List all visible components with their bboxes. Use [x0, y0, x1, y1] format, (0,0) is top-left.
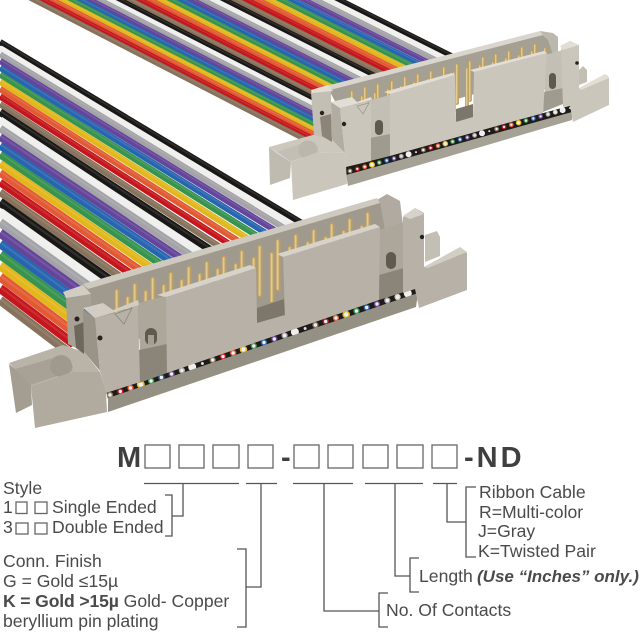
length legend: (Use “Inches” only.) — [477, 567, 639, 586]
length legend: Length — [419, 566, 473, 586]
dash: - — [281, 442, 291, 474]
ribbon cable legend — [478, 482, 596, 561]
part number prefix: M — [117, 442, 141, 474]
left front tine — [31, 372, 107, 428]
upper wire end strip — [345, 105, 573, 176]
underlines and leader lines — [144, 484, 476, 627]
upper lower lip — [346, 112, 572, 186]
lower ribbon cable — [0, 39, 302, 348]
upper left front tine — [291, 152, 347, 200]
upper rear block — [540, 31, 558, 60]
connector finish legend: G = Gold ≤15µ — [3, 571, 118, 591]
style legend: Double Ended — [52, 517, 164, 537]
upper ribbon cable — [28, 0, 453, 139]
style legend: Single Ended — [52, 497, 157, 517]
connector finish legend: K = Gold >15µ Gold- Copper — [3, 591, 229, 611]
upper gold pins — [352, 45, 545, 135]
ribbon cable legend: Ribbon Cable — [479, 482, 586, 502]
style legend: Style — [3, 478, 42, 498]
rear right block — [377, 194, 403, 232]
upper connector — [269, 31, 609, 200]
ribbon cable legend: R=Multi-color — [479, 502, 583, 522]
first code boxes — [145, 445, 273, 468]
lower lip — [108, 293, 418, 412]
upper left rear post — [311, 85, 333, 142]
upper left front block — [331, 97, 372, 167]
right rear tine — [425, 231, 440, 262]
left end gap with keyhole — [138, 296, 167, 383]
style legend: 1 — [3, 497, 13, 517]
upper notch floor — [456, 104, 473, 122]
upper left mounting flange — [269, 133, 345, 185]
panel top edges — [157, 265, 256, 297]
right post and flange — [403, 208, 467, 308]
notch floor — [257, 299, 285, 324]
second code boxes — [294, 445, 457, 468]
right end gap with keyhole — [379, 222, 404, 300]
connector finish legend — [3, 551, 229, 631]
left front block — [83, 300, 140, 393]
upper right gap with keyhole — [543, 50, 563, 112]
upper panel top edge — [384, 73, 455, 94]
left rear post — [63, 285, 91, 354]
rear rim — [83, 198, 380, 289]
upper left gap with keyhole — [370, 95, 390, 161]
upper panel top edge right — [470, 51, 547, 72]
part number code — [117, 442, 525, 474]
part number suffix: -ND — [464, 442, 525, 474]
panel top edge right — [277, 224, 380, 257]
left mounting flange — [9, 345, 100, 413]
upper rear rim — [318, 31, 543, 90]
rear wall and tray — [84, 202, 385, 345]
lower connector — [9, 194, 467, 428]
upper front wall panels — [390, 53, 547, 156]
ribbon cable legend: J=Gray — [478, 521, 535, 541]
front wall panels — [166, 227, 380, 373]
upper right rear tine — [579, 66, 587, 85]
upper right post and flange — [560, 41, 609, 122]
ribbon cable legend: K=Twisted Pair — [478, 541, 596, 561]
wire end strip — [106, 285, 420, 399]
connector finish legend: Conn. Finish — [3, 551, 102, 571]
upper rear wall and tray — [328, 33, 558, 130]
number of contacts legend: No. Of Contacts — [386, 600, 511, 620]
gold pins — [117, 214, 368, 345]
style legend: 3 — [3, 517, 13, 537]
style legend — [3, 478, 164, 537]
connector finish legend: beryllium pin plating — [3, 611, 158, 631]
